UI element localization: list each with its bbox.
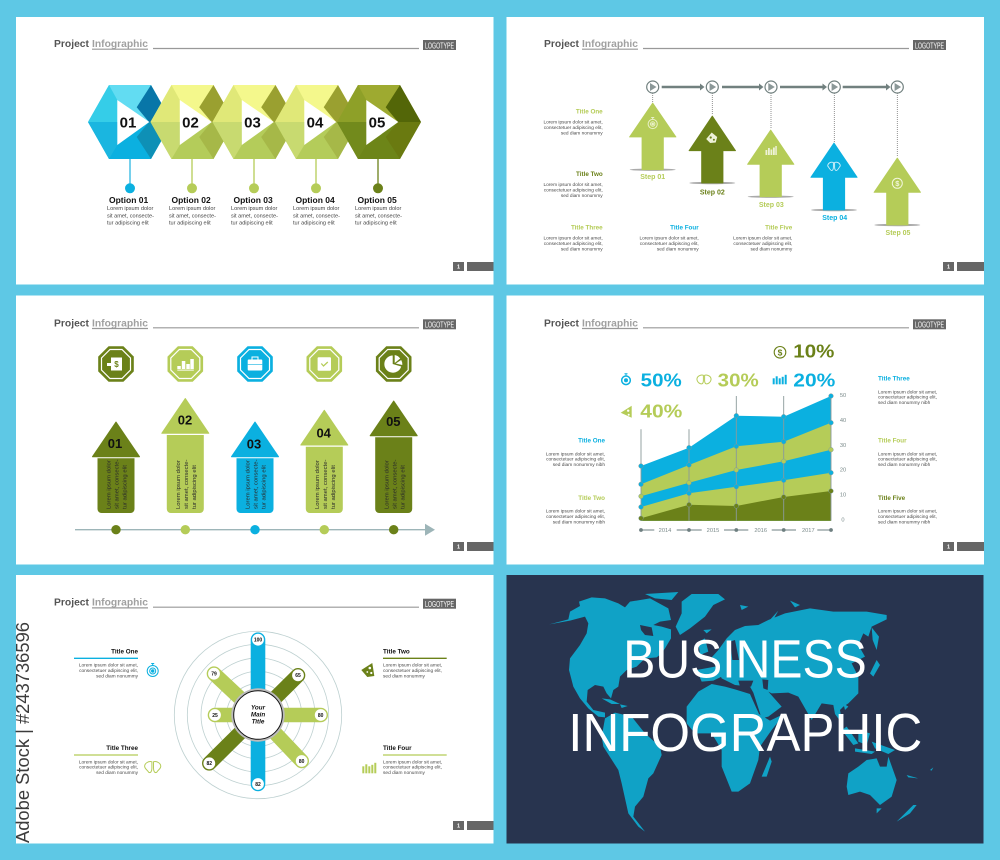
heading: Infographic — [92, 38, 148, 50]
stat: 50 percent: 50% — [641, 371, 682, 391]
text: title three: Title Three — [106, 745, 138, 752]
icon: octagon pie chart — [376, 346, 412, 382]
y axis labels — [840, 393, 846, 523]
hexagon 05: 05 — [369, 114, 385, 131]
radial bar chart: 100 — [254, 638, 262, 644]
stat: 20 percent — [773, 371, 835, 391]
text: title three — [544, 224, 603, 252]
radial bar chart: 82 — [255, 782, 261, 788]
option 03 pin and text: Lorem ipsum dolor — [231, 206, 277, 212]
y axis labels: 0 — [841, 517, 845, 523]
card: arrow 03: tur adipiscing elit — [262, 465, 268, 509]
text: title four: consectetuer adipiscing elit, — [878, 457, 937, 463]
card: arrow 01: 01 — [108, 436, 122, 451]
option 02 pin and text — [169, 159, 216, 227]
heading: Infographic — [92, 597, 148, 609]
text: title one: consectetuer adipiscing elit, — [544, 125, 603, 131]
text: title one: consectetuer adipiscing elit, — [79, 668, 138, 674]
card: arrow 04: tur adipiscing elit — [331, 465, 337, 509]
arrow: step 01 — [630, 103, 676, 181]
arrow: step 02 — [689, 116, 736, 196]
card: arrow 05: sit amet, consecte- — [392, 460, 398, 509]
text: title four: consectetuer adipiscing elit, — [640, 241, 699, 247]
card: arrow 05: tur adipiscing elit — [400, 465, 406, 509]
page number: 1 — [947, 544, 950, 550]
option 03 pin and text: tur adipiscing elit — [231, 221, 273, 227]
text: title four: sed diam nonummy — [657, 246, 699, 252]
option 04 pin and text: tur adipiscing elit — [293, 221, 335, 227]
icon: bars — [766, 146, 777, 155]
card: arrow 02: tur adipiscing elit — [192, 465, 198, 509]
card: arrow 05: Lorem ipsum dolor — [384, 460, 390, 509]
heading: Project — [544, 317, 579, 329]
chart centre title: Main — [251, 712, 265, 718]
text: title one — [546, 438, 605, 468]
text: title two: consectetuer adipiscing elit, — [546, 514, 605, 520]
text: title two: Title Two — [576, 171, 603, 178]
heading: LOGOTYPE — [425, 41, 454, 50]
text: title two: Lorem ipsum dolor sit amet, — [544, 182, 603, 188]
text: title two: sed diam nonummy — [561, 193, 603, 199]
option 04 pin and text: Lorem ipsum dolor — [293, 206, 339, 212]
text: title one — [544, 109, 603, 136]
heading: Infographic — [92, 317, 148, 329]
card: arrow 04: sit amet, consecte- — [323, 460, 329, 509]
text: title two — [383, 648, 447, 679]
heading: Infographic — [582, 317, 638, 329]
area chart — [639, 394, 833, 521]
text: title three: consectetuer adipiscing elit, — [544, 241, 603, 247]
arrow: step 01: Step 01 — [640, 174, 665, 181]
panel: stacked area chart — [506, 296, 984, 564]
hexagon 02: 02 — [182, 114, 199, 131]
page number: 1 — [457, 264, 460, 270]
option 03 pin and text — [231, 159, 278, 227]
x axis timeline: 2014 — [659, 528, 671, 534]
text: title four: Lorem ipsum dolor sit amet, — [383, 759, 442, 765]
page number — [453, 821, 494, 830]
text: title two: consectetuer adipiscing elit, — [383, 668, 442, 674]
icon: brain — [828, 162, 840, 171]
hexagon 04: 04 — [307, 114, 324, 131]
card: arrow 04: Lorem ipsum dolor — [315, 460, 321, 509]
text: title four: Title Four — [878, 438, 907, 445]
heading — [544, 38, 946, 50]
card: arrow 02: 02 — [178, 412, 192, 427]
heading: Infographic — [582, 38, 638, 50]
text: title three: Lorem ipsum dolor sit amet, — [544, 235, 603, 241]
text: title two: Title Two — [383, 648, 410, 655]
hexagon 05 — [337, 85, 421, 159]
text: title three: consectetuer adipiscing elit, — [79, 765, 138, 771]
option 05 pin and text: Lorem ipsum dolor — [355, 206, 401, 212]
text: title five: Lorem ipsum dolor sit amet, — [878, 509, 937, 515]
text: title three — [74, 745, 139, 776]
text: title four: Title Four — [383, 745, 412, 752]
heading — [544, 317, 946, 330]
x axis timeline: 2015 — [707, 528, 719, 534]
text: title three — [878, 376, 937, 406]
radial bar chart — [174, 631, 342, 799]
text: title five: sed diam nonummy — [750, 246, 793, 252]
stock id caption: Adobe Stock | #243736596 — [13, 622, 33, 843]
option 01 pin and text: tur adipiscing elit — [107, 221, 149, 227]
chart centre title: Your — [251, 704, 266, 711]
text: title one: Lorem ipsum dolor sit amet, — [546, 451, 605, 457]
text: title four: sed diam nonummy — [383, 770, 425, 776]
text: title one — [74, 648, 139, 679]
timeline arrow — [75, 524, 435, 536]
card: arrow 01 — [92, 422, 140, 513]
text: title two: consectetuer adipiscing elit, — [544, 188, 603, 194]
card: arrow 05: 05 — [386, 414, 401, 429]
title: BUSINESS — [623, 629, 867, 689]
text: title one: sed diam nonummy — [96, 673, 139, 679]
card: arrow 01: Lorem ipsum dolor — [107, 460, 113, 509]
arrow: step 04 — [811, 143, 857, 222]
heading: Project — [54, 597, 89, 609]
arrow: step 04: Step 04 — [822, 215, 847, 222]
text: title one: Title One — [576, 109, 603, 116]
option 04 pin and text: sit amet, consecte- — [293, 213, 340, 219]
text: title five: consectetuer adipiscing elit, — [878, 514, 937, 520]
radial bar chart: 82 — [207, 761, 212, 767]
arrow: step 03: Step 03 — [759, 202, 784, 209]
icon: trefoil — [361, 663, 374, 677]
text: title three: Lorem ipsum dolor sit amet, — [79, 759, 138, 765]
text: title one: Title One — [578, 438, 605, 445]
icon: brain — [145, 762, 161, 773]
text: title three: Title Three — [878, 376, 910, 383]
text: title four: sed diam nonummy nibh — [878, 462, 931, 468]
x axis timeline: 2017 — [802, 528, 815, 534]
arrow: step 05: Step 05 — [886, 230, 911, 237]
text: title five — [733, 224, 793, 252]
icon: octagon bar chart — [168, 346, 203, 382]
card: arrow 02: sit amet, consecte- — [184, 460, 190, 509]
option 02 pin and text: Lorem ipsum dolor — [169, 206, 215, 212]
icon: octagon checkbox — [306, 346, 342, 382]
option 05 pin and text — [355, 159, 402, 227]
hexagon 01 — [88, 85, 172, 159]
page number — [453, 542, 494, 551]
text: title five: Title Five — [878, 495, 906, 502]
option 01 pin and text: Lorem ipsum dolor — [107, 206, 153, 212]
option 04 pin and text — [293, 159, 340, 227]
stat: 10 percent: $ — [778, 347, 783, 357]
option 01 pin and text — [107, 159, 154, 227]
radial bar chart: 80 — [299, 759, 305, 765]
card: arrow 04 — [301, 410, 348, 513]
icon: stopwatch — [648, 118, 657, 129]
icon: trefoil — [706, 132, 717, 143]
stat: 40 percent — [621, 401, 682, 421]
text: title one: sed diam nonummy — [561, 130, 603, 136]
page number: 1 — [947, 264, 950, 270]
panel: step arrows — [506, 17, 984, 284]
text: title two — [544, 171, 603, 199]
stat: 40 percent: 40% — [640, 401, 682, 421]
radial bar chart: 80 — [318, 713, 324, 719]
text: title two: sed diam nonummy — [383, 673, 425, 679]
icon: octagon receipt — [98, 346, 134, 382]
heading: Project — [54, 38, 89, 50]
panel: world map cover — [506, 575, 984, 844]
page number — [943, 262, 984, 271]
step markers and connecting arrows — [647, 81, 903, 157]
heading — [54, 38, 456, 50]
stat: 50 percent — [622, 371, 682, 391]
panel: radial chart — [16, 575, 494, 844]
stat: 20 percent: 20% — [793, 371, 835, 391]
arrow: step 05 — [874, 158, 921, 237]
radial bar chart: 79 — [211, 672, 217, 678]
text: title four — [383, 745, 447, 776]
title: INFOGRAPHIC — [568, 703, 922, 763]
hexagon 02 — [150, 85, 234, 159]
text: title three: sed diam nonummy — [96, 770, 139, 776]
text: title five: Title Five — [765, 224, 793, 231]
chart centre title: Title — [252, 719, 265, 726]
stat: 30 percent: 30% — [718, 371, 759, 391]
text: title three: sed diam nonummy — [561, 246, 603, 252]
y axis labels: 50 — [840, 393, 846, 399]
option 01 pin and text: Option 01 — [109, 195, 148, 205]
option 03 pin and text: Option 03 — [234, 195, 273, 205]
hexagon 04 — [275, 85, 359, 159]
card: arrow 01: sit amet, consecte- — [115, 460, 121, 509]
text: title five: sed diam nonummy nibh — [878, 519, 931, 525]
page number — [943, 542, 984, 551]
heading — [54, 317, 456, 330]
heading: LOGOTYPE — [915, 41, 944, 50]
option 02 pin and text: Option 02 — [172, 195, 211, 205]
text: title five — [878, 495, 937, 525]
text: title two: Title Two — [578, 495, 605, 502]
option 02 pin and text: sit amet, consecte- — [169, 213, 216, 219]
option 03 pin and text: sit amet, consecte- — [231, 213, 278, 219]
arrow: step 03 — [748, 130, 794, 209]
page number — [453, 262, 494, 271]
stat: 30 percent — [697, 371, 759, 391]
option 01 pin and text: sit amet, consecte- — [107, 213, 154, 219]
text: title one: Lorem ipsum dolor sit amet, — [544, 120, 603, 126]
icon: stopwatch — [147, 664, 158, 676]
text: title five: consectetuer adipiscing elit, — [733, 241, 792, 247]
card: arrow 03 — [232, 422, 278, 513]
option 05 pin and text: Option 05 — [358, 195, 397, 205]
text: title five: Lorem ipsum dolor sit amet, — [733, 235, 792, 241]
option 05 pin and text: tur adipiscing elit — [355, 221, 397, 227]
card: arrow 03: 03 — [247, 436, 261, 451]
hexagon 03: 03 — [244, 114, 261, 131]
text: title four — [640, 224, 699, 252]
heading: Project — [54, 317, 89, 329]
heading: LOGOTYPE — [425, 321, 454, 330]
y axis labels: 10 — [840, 492, 846, 498]
hexagon 01: 01 — [120, 114, 136, 131]
icon: dollar: $ — [895, 179, 900, 188]
y axis labels: 20 — [840, 468, 846, 474]
world map — [549, 592, 933, 832]
text: title one: Title One — [111, 648, 138, 655]
text: title four: Title Four — [670, 224, 699, 231]
text: title three: consectetuer adipiscing elit, — [878, 395, 937, 401]
icon: bars — [362, 763, 376, 773]
stat: 10 percent: 10% — [793, 341, 834, 361]
stat: 10 percent — [774, 341, 834, 361]
option 04 pin and text: Option 04 — [296, 195, 335, 205]
option 02 pin and text: tur adipiscing elit — [169, 221, 211, 227]
text: title two — [546, 495, 605, 525]
icon: octagon briefcase — [237, 346, 273, 382]
card: arrow 04: 04 — [316, 425, 332, 440]
title — [568, 629, 922, 763]
radial bar chart: 65 — [295, 673, 301, 679]
heading — [54, 597, 456, 609]
arrow: step 02: Step 02 — [700, 189, 725, 196]
card: arrow 02 — [162, 398, 209, 513]
hexagon 03 — [212, 85, 296, 159]
icon: octagon receipt: $ — [114, 360, 119, 369]
heading: Project — [544, 38, 579, 50]
option 05 pin and text: sit amet, consecte- — [355, 213, 402, 219]
card: arrow 01: tur adipiscing elit — [123, 465, 129, 509]
panel: hexagon options — [16, 17, 494, 284]
heading: LOGOTYPE — [915, 321, 944, 330]
text: title three: sed diam nonummy nibh — [878, 400, 931, 406]
text: title one: Lorem ipsum dolor sit amet, — [79, 663, 138, 669]
card: arrow 05 — [370, 401, 417, 513]
page number: 1 — [457, 824, 460, 830]
card: arrow 02: Lorem ipsum dolor — [176, 460, 182, 509]
page number: 1 — [457, 544, 460, 550]
text: title four: Lorem ipsum dolor sit amet, — [640, 235, 699, 241]
text: title three: Lorem ipsum dolor sit amet, — [878, 389, 937, 395]
heading: LOGOTYPE — [425, 600, 454, 609]
text: title one: sed diam nonummy nibh — [553, 462, 605, 468]
text: title two: Lorem ipsum dolor sit amet, — [546, 509, 605, 515]
text: title four — [878, 438, 937, 468]
card: arrow 03: sit amet, consecte- — [254, 460, 260, 509]
y axis labels: 30 — [840, 443, 846, 449]
x axis timeline — [639, 528, 833, 534]
x axis timeline: 2016 — [754, 528, 767, 534]
text: title two: Lorem ipsum dolor sit amet, — [383, 663, 442, 669]
text: title two: sed diam nonummy nibh — [553, 519, 605, 525]
chart centre title — [251, 704, 266, 726]
text: title three: Title Three — [571, 224, 603, 231]
card: arrow 03: Lorem ipsum dolor — [246, 460, 252, 509]
text: title four: consectetuer adipiscing elit, — [383, 765, 442, 771]
radial bar chart: 25 — [212, 713, 218, 719]
y axis labels: 40 — [840, 418, 846, 424]
text: title one: consectetuer adipiscing elit, — [546, 457, 605, 463]
panel: vertical arrow cards — [16, 296, 494, 564]
text: title four: Lorem ipsum dolor sit amet, — [878, 451, 937, 457]
